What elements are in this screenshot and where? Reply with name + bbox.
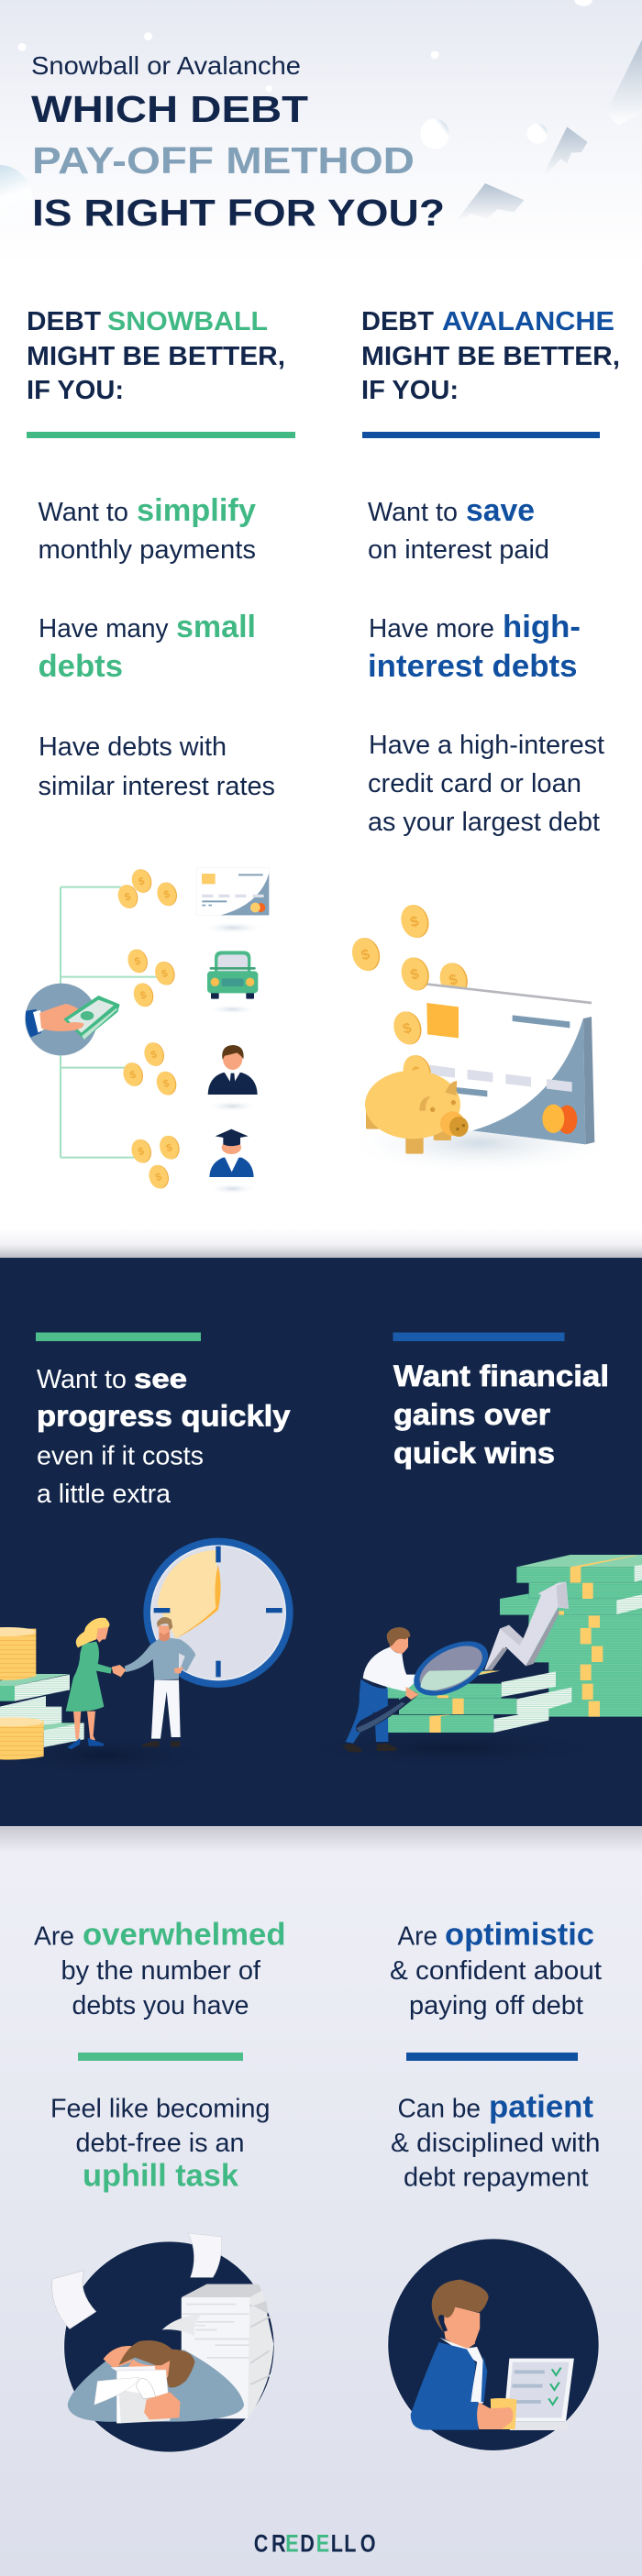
- panel: debt avalanche column heading: IF YOU:: [361, 376, 459, 405]
- icon: coins: $: [139, 989, 149, 1002]
- icon: checklist tablet: [504, 2359, 574, 2430]
- icon: coins: $: [162, 888, 172, 901]
- icon: falling coins: $: [401, 1020, 414, 1038]
- text block: avalanche reasons: save: [466, 493, 535, 528]
- text block: snowball reasons: small: [176, 610, 256, 644]
- icon: woman head down: [68, 2340, 244, 2423]
- logo: Credello: CREDELLO: [254, 2530, 376, 2558]
- text block: snowball uphill task: debt-free is an: [75, 2129, 244, 2158]
- text block: avalanche reasons: Have more: [369, 614, 494, 644]
- icon: cash and coin stacks: [0, 1627, 84, 1760]
- icon: coins: $: [133, 955, 142, 968]
- text block: snowball quick progress: Want to: [37, 1365, 127, 1394]
- text block: snowball uphill task: uphill task: [83, 2158, 238, 2193]
- icon: hand with money: [25, 984, 120, 1055]
- title: WHICH DEBT: [31, 88, 308, 130]
- text block: avalanche patient: Can be: [398, 2094, 481, 2123]
- text block: snowball uphill task: Feel like becoming: [50, 2094, 270, 2123]
- panel: navy band: [0, 1258, 642, 1826]
- text block: snowball reasons: monthly payments: [39, 535, 256, 565]
- panel: debt avalanche column heading: MIGHT BE BETTER,: [361, 342, 620, 371]
- icon: piggy bank: [365, 1071, 469, 1154]
- icon: coins: $: [165, 1142, 174, 1154]
- illustration: piggy bank and credit card: [342, 901, 617, 1175]
- text block: snowball quick progress: even if it costs: [37, 1441, 204, 1470]
- text block: avalanche reasons: high-: [503, 610, 581, 644]
- icon: coins: $: [149, 1049, 159, 1062]
- icon: coins: [116, 866, 183, 1191]
- icon: coins: $: [137, 1146, 146, 1158]
- text block: avalanche reasons: Have a high-interest: [369, 731, 604, 760]
- icon: coins: $: [138, 875, 147, 888]
- icon: large credit card: [422, 984, 594, 1144]
- icon: clock: [143, 1538, 293, 1688]
- text block: avalanche reasons: credit card or loan: [368, 769, 581, 798]
- text block: snowball reasons: Want to: [39, 498, 128, 527]
- panel: debt avalanche column heading: AVALANCHE: [442, 307, 614, 336]
- icon: graduate: [208, 1129, 256, 1194]
- text block: snowball overwhelmed: Are: [34, 1921, 74, 1951]
- text block: avalanche financial gains: [393, 1333, 609, 1470]
- text block: avalanche optimistic: [390, 1918, 602, 2061]
- text block: snowball reasons: Have many: [39, 614, 169, 644]
- title: IS RIGHT FOR YOU?: [32, 192, 445, 234]
- icon: falling coins: $: [408, 914, 421, 930]
- icon: magnifying glass: [356, 1630, 497, 1733]
- icon: flying sheets: [52, 2233, 222, 2329]
- title: Snowball or Avalanche: [31, 51, 301, 80]
- text block: avalanche financial gains: gains over: [393, 1398, 550, 1431]
- text block: avalanche financial gains: quick wins: [393, 1437, 555, 1470]
- text block: avalanche patient: & disciplined with: [391, 2129, 600, 2158]
- text block: snowball reasons: [39, 493, 275, 801]
- illustration: patient man with checklist: [388, 2239, 599, 2450]
- text block: avalanche patient: debt repayment: [404, 2163, 589, 2193]
- illustration: snowball payments to four debts: [25, 866, 269, 1194]
- text block: avalanche optimistic: paying off debt: [409, 1991, 583, 2020]
- icon: front cash stacks: [387, 1671, 571, 1733]
- icon: man in blue blazer: [411, 2280, 516, 2430]
- text block: snowball reasons: similar interest rates: [39, 772, 275, 801]
- text block: avalanche optimistic: optimistic: [445, 1918, 594, 1953]
- text block: snowball overwhelmed: overwhelmed: [83, 1918, 286, 1953]
- icon: coin behind card: [437, 960, 471, 999]
- text block: snowball quick progress: progress quickly: [37, 1399, 291, 1432]
- panel: debt avalanche column heading: [361, 307, 620, 438]
- icon: car: [207, 951, 258, 1014]
- icon: coins: $: [128, 1069, 138, 1082]
- icon: falling coins: [349, 901, 435, 1092]
- text block: snowball reasons: Have debts with: [39, 732, 227, 762]
- illustration: overwhelmed woman with paper pile: [52, 2233, 274, 2452]
- title: PAY-OFF METHOD: [32, 139, 415, 182]
- panel: debt snowball column heading: [27, 307, 295, 438]
- text block: snowball quick progress: a little extra: [37, 1480, 172, 1509]
- icon: man shaking hands: [112, 1617, 195, 1747]
- title: [31, 51, 445, 234]
- icon: man in suit: [206, 1045, 258, 1112]
- icon: falling coins: $: [409, 966, 421, 984]
- text block: snowball overwhelmed: by the number of: [61, 1956, 261, 1986]
- panel: debt snowball column heading: MIGHT BE BETTER,: [27, 342, 285, 371]
- text block: snowball quick progress: see: [134, 1364, 187, 1394]
- panel: debt snowball column heading: SNOWBALL: [107, 307, 268, 336]
- text block: avalanche optimistic: & confident about: [390, 1956, 602, 1986]
- icon: coins: $: [124, 891, 133, 904]
- icon: credit card: [196, 868, 269, 934]
- text block: avalanche patient: [391, 2090, 600, 2193]
- panel: lower section background: [0, 1826, 642, 2576]
- text block: avalanche reasons: on interest paid: [368, 535, 549, 565]
- text block: snowball quick progress: [36, 1333, 291, 1509]
- text block: snowball reasons: debts: [39, 649, 123, 684]
- text block: snowball overwhelmed: debts you have: [72, 1991, 249, 2020]
- text block: avalanche reasons: [368, 493, 604, 837]
- icon: coins: $: [160, 968, 170, 980]
- icon: woman in green dress: [66, 1618, 112, 1749]
- icon: large cash stacks: [500, 1555, 642, 1717]
- text block: snowball reasons: simplify: [137, 493, 256, 528]
- panel: header background: [0, 0, 642, 1238]
- icon: falling coins: $: [411, 1064, 423, 1081]
- text block: avalanche optimistic: Are: [398, 1921, 437, 1951]
- panel: divider shadow above navy band: [0, 1228, 642, 1258]
- icon: growth arrow: [484, 1582, 569, 1670]
- text block: snowball overwhelmed: [34, 1918, 286, 2061]
- panel: debt snowball column heading: IF YOU:: [27, 376, 124, 405]
- icon: falling coins: $: [360, 947, 371, 963]
- text block: avalanche financial gains: Want financial: [393, 1360, 609, 1393]
- icon: coins: $: [154, 1172, 163, 1183]
- icon: coin behind card: $: [448, 972, 459, 989]
- text block: avalanche reasons: interest debts: [368, 649, 578, 684]
- panel: debt snowball column heading: DEBT: [27, 307, 101, 336]
- icon: man with magnifying glass: [342, 1627, 415, 1753]
- text block: avalanche patient: patient: [489, 2090, 593, 2125]
- icon: paper pile: [162, 2284, 273, 2418]
- text block: snowball uphill task: [50, 2094, 270, 2193]
- panel: debt avalanche column heading: DEBT: [361, 307, 434, 336]
- text block: avalanche reasons: Want to: [368, 498, 458, 527]
- icon: coins: $: [162, 1078, 172, 1090]
- illustration: magnifying glass over cash scene: [282, 1555, 642, 1769]
- illustration: clock handshake scene: [0, 1538, 293, 1778]
- text block: avalanche reasons: as your largest debt: [368, 808, 600, 837]
